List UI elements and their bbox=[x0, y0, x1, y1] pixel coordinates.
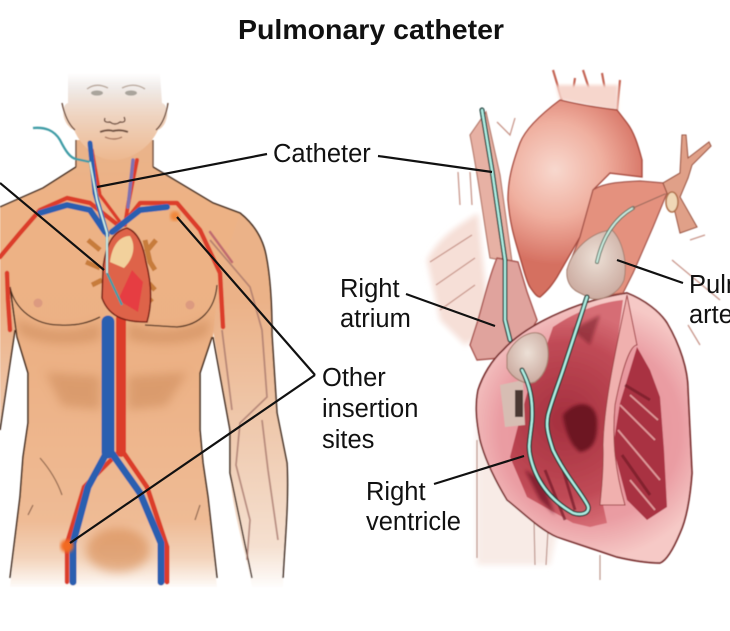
arm vessels bbox=[210, 240, 278, 560]
label: other insertion sites: insertion bbox=[322, 395, 418, 423]
pectoral and abdominal contour lines bbox=[10, 285, 217, 520]
grey wall and dark opening bbox=[500, 380, 525, 427]
label: right atrium: atrium bbox=[340, 305, 411, 333]
title: Pulmonary catheter bbox=[238, 14, 504, 45]
figure: human torso with vessels bbox=[0, 73, 288, 587]
left arm bbox=[0, 207, 40, 430]
label: right ventricle: ventricle bbox=[366, 508, 461, 536]
small heart bbox=[86, 228, 156, 322]
aorta bbox=[508, 100, 642, 297]
superior vena cava bbox=[470, 112, 512, 262]
aortic top branches bbox=[553, 70, 620, 110]
leader lines bbox=[0, 154, 683, 543]
pulmonary artery bbox=[567, 181, 667, 298]
label: right atrium: Right bbox=[340, 275, 400, 303]
left ventricle cavity bbox=[613, 347, 667, 520]
label: right ventricle: Right bbox=[366, 478, 426, 506]
catheter entering neck bbox=[33, 128, 122, 305]
right arm bbox=[205, 210, 288, 587]
dark trabeculae bbox=[525, 315, 600, 515]
heart outer wall bbox=[476, 293, 692, 563]
nipples bbox=[34, 298, 42, 308]
body outline bbox=[0, 167, 288, 578]
facial features bbox=[62, 85, 168, 167]
catheter bbox=[482, 110, 665, 514]
pale background vessels bbox=[427, 213, 490, 345]
right ventricle cavity bbox=[510, 300, 623, 527]
septum bbox=[600, 295, 637, 505]
blue veins bbox=[40, 143, 167, 582]
pulmonary artery branches bbox=[663, 135, 711, 233]
pulmonary ring bbox=[666, 192, 678, 212]
insertion site markers bbox=[170, 211, 180, 221]
lower pale vessels bbox=[477, 390, 560, 565]
label: other insertion sites: sites bbox=[322, 426, 374, 454]
torso bbox=[0, 140, 240, 587]
right atrium bbox=[470, 258, 537, 360]
label: other insertion sites: Other bbox=[322, 364, 386, 392]
left ventricle trabeculae bbox=[618, 395, 660, 510]
label: catheter: Catheter bbox=[273, 140, 371, 168]
figure: enlarged heart cross-section bbox=[427, 70, 720, 580]
red arteries bbox=[0, 150, 232, 582]
chest and abdomen muscle shading bbox=[15, 318, 210, 572]
tricuspid valve bbox=[507, 333, 548, 383]
pulmonary valve bbox=[567, 230, 625, 299]
head bbox=[63, 73, 167, 160]
